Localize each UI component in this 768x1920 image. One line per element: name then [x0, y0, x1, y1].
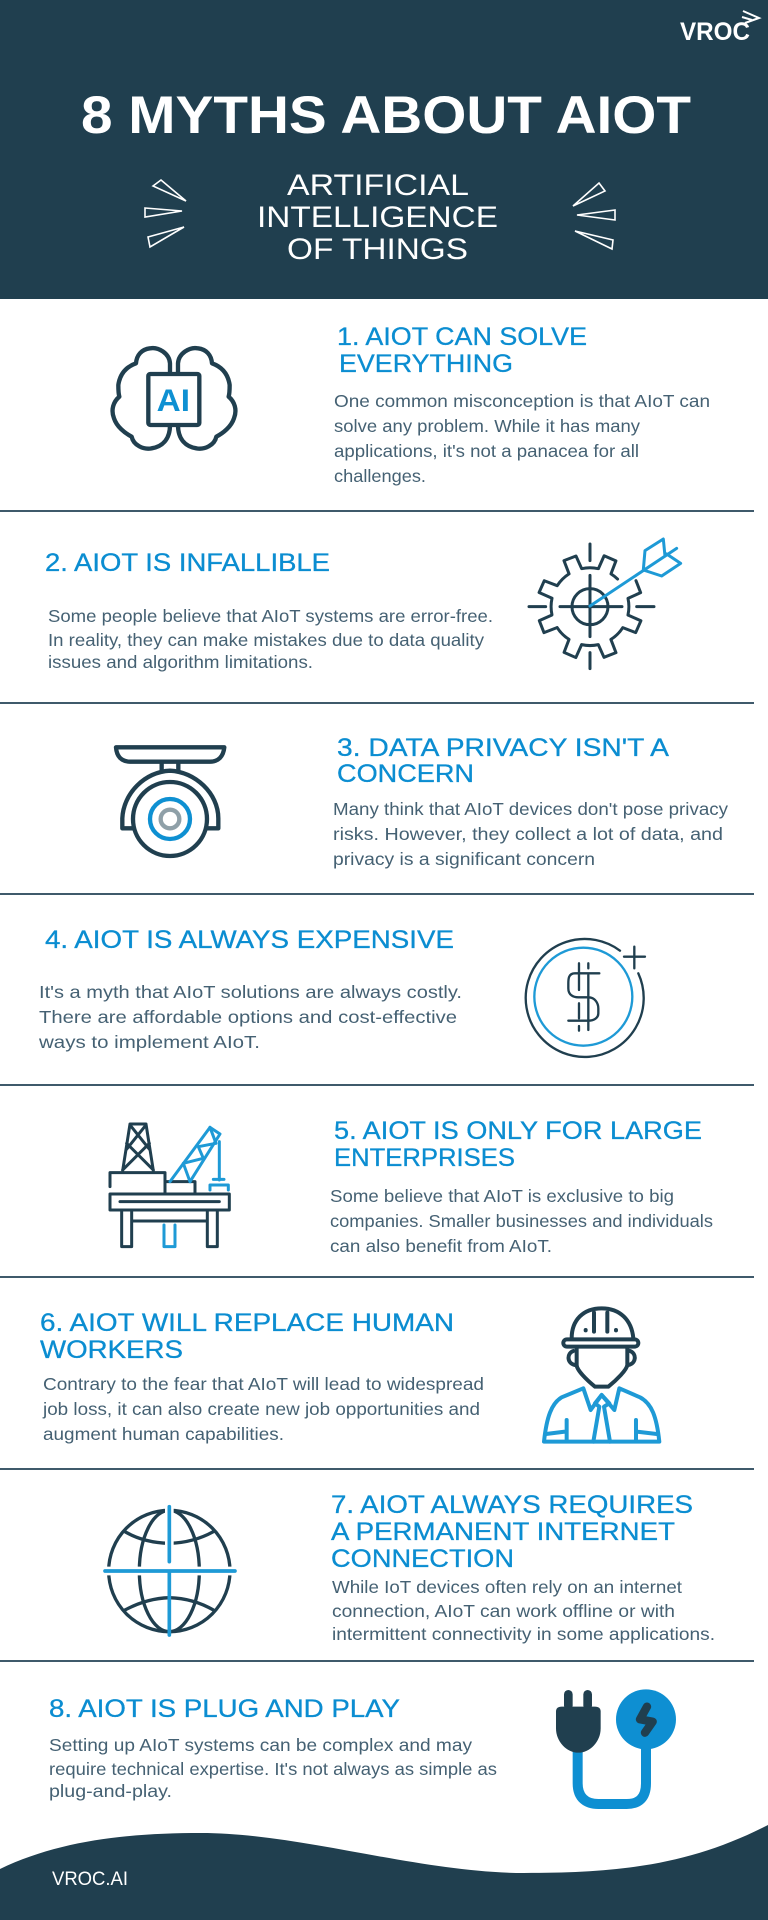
subtitle: [257, 169, 498, 266]
icon: gear target with dart: [529, 539, 681, 669]
text block: companies. Smaller businesses and individuals: [330, 1211, 713, 1231]
icon: AI brain: [113, 348, 235, 449]
heading: 8. AIOT IS PLUG AND PLAY: [49, 1695, 400, 1723]
text block: connection, AIoT can work offline or with: [332, 1601, 675, 1621]
text block: Setting up AIoT systems can be complex and may: [49, 1735, 472, 1755]
text block: [330, 1186, 713, 1256]
subtitle: INTELLIGENCE: [257, 201, 498, 234]
footer text: VROC.AI: VROC.AI: [52, 1869, 128, 1890]
heading: CONCERN: [337, 760, 474, 788]
footer wave: [0, 1825, 768, 1920]
icon: plug and power: [556, 1689, 676, 1804]
heading: CONNECTION: [331, 1545, 514, 1573]
heading: 4. AIOT IS ALWAYS EXPENSIVE: [45, 926, 454, 954]
icon: AI brain: AI: [157, 383, 190, 418]
text block: [38, 982, 462, 1052]
heading: WORKERS: [40, 1336, 183, 1364]
text block: intermittent connectivity in some applications.: [332, 1624, 715, 1644]
icon: worker with hard hat: [544, 1308, 659, 1442]
icon: security camera: [116, 747, 224, 856]
heading: [337, 734, 669, 788]
text block: plug-and-play.: [49, 1781, 172, 1801]
text block: One common misconception is that AIoT can: [334, 391, 710, 411]
subtitle: ARTIFICIAL: [287, 169, 469, 202]
text block: can also benefit from AIoT.: [330, 1236, 552, 1256]
subtitle: OF THINGS: [287, 233, 468, 266]
text block: In reality, they can make mistakes due to data quality: [48, 630, 484, 650]
heading: 1. AIOT CAN SOLVE: [337, 323, 587, 351]
panel: myth 4: [38, 926, 645, 1057]
text block: [49, 1735, 497, 1801]
panel: myth 3: [116, 734, 728, 869]
text block: Some people believe that AIoT systems are error-free.: [48, 606, 493, 626]
text block: [48, 606, 493, 672]
panel: myth 5: [110, 1117, 713, 1256]
text block: risks. However, they collect a lot of data, and: [333, 824, 723, 844]
text block: It's a myth that AIoT solutions are always costly.: [39, 982, 462, 1002]
heading: ENTERPRISES: [334, 1144, 515, 1172]
panel: myth 6: [40, 1308, 659, 1444]
icon: oil rig: [110, 1124, 229, 1247]
header band: [0, 0, 768, 299]
text block: There are affordable options and cost-effective: [39, 1007, 457, 1027]
panel: myth 7: [105, 1491, 715, 1644]
heading: 5. AIOT IS ONLY FOR LARGE: [334, 1117, 702, 1145]
text block: augment human capabilities.: [43, 1424, 284, 1444]
text block: Some believe that AIoT is exclusive to big: [330, 1186, 674, 1206]
heading: EVERYTHING: [339, 350, 513, 378]
heading: 6. AIOT WILL REPLACE HUMAN: [40, 1309, 454, 1337]
icon: dollar coin with plus: [526, 939, 645, 1057]
text block: While IoT devices often rely on an internet: [332, 1577, 682, 1597]
text block: Many think that AIoT devices don't pose privacy: [333, 799, 728, 819]
icon: right burst: [573, 183, 615, 249]
title: 8 MYTHS ABOUT AIOT: [81, 86, 691, 145]
icon: globe: [105, 1503, 235, 1635]
icon: left burst: [145, 180, 186, 247]
heading: [334, 1117, 702, 1172]
heading: 3. DATA PRIVACY ISN'T A: [337, 734, 669, 762]
heading: 2. AIOT IS INFALLIBLE: [45, 549, 330, 577]
heading: [40, 1309, 454, 1364]
heading: [337, 323, 587, 378]
panel: myth 1: [113, 323, 710, 486]
logo: VROC: VROC: [680, 18, 750, 46]
text block: solve any problem. While it has many: [334, 416, 640, 436]
text block: [42, 1374, 484, 1444]
panel: myth 2: [45, 539, 681, 672]
text block: issues and algorithm limitations.: [48, 652, 313, 672]
panel: myth 8: [49, 1689, 676, 1804]
text block: applications, it's not a panacea for all: [334, 441, 639, 461]
heading: A PERMANENT INTERNET: [331, 1518, 675, 1546]
text block: privacy is a significant concern: [333, 849, 595, 869]
text block: ways to implement AIoT.: [38, 1032, 260, 1052]
text block: Contrary to the fear that AIoT will lead to widespread: [43, 1374, 484, 1394]
heading: 7. AIOT ALWAYS REQUIRES: [331, 1491, 693, 1519]
text block: [334, 391, 710, 486]
heading: [331, 1491, 693, 1573]
text block: [333, 799, 728, 869]
text block: [332, 1577, 715, 1644]
text block: require technical expertise. It's not always as simple as: [49, 1759, 497, 1779]
text block: job loss, it can also create new job opportunities and: [42, 1399, 480, 1419]
text block: challenges.: [334, 466, 426, 486]
